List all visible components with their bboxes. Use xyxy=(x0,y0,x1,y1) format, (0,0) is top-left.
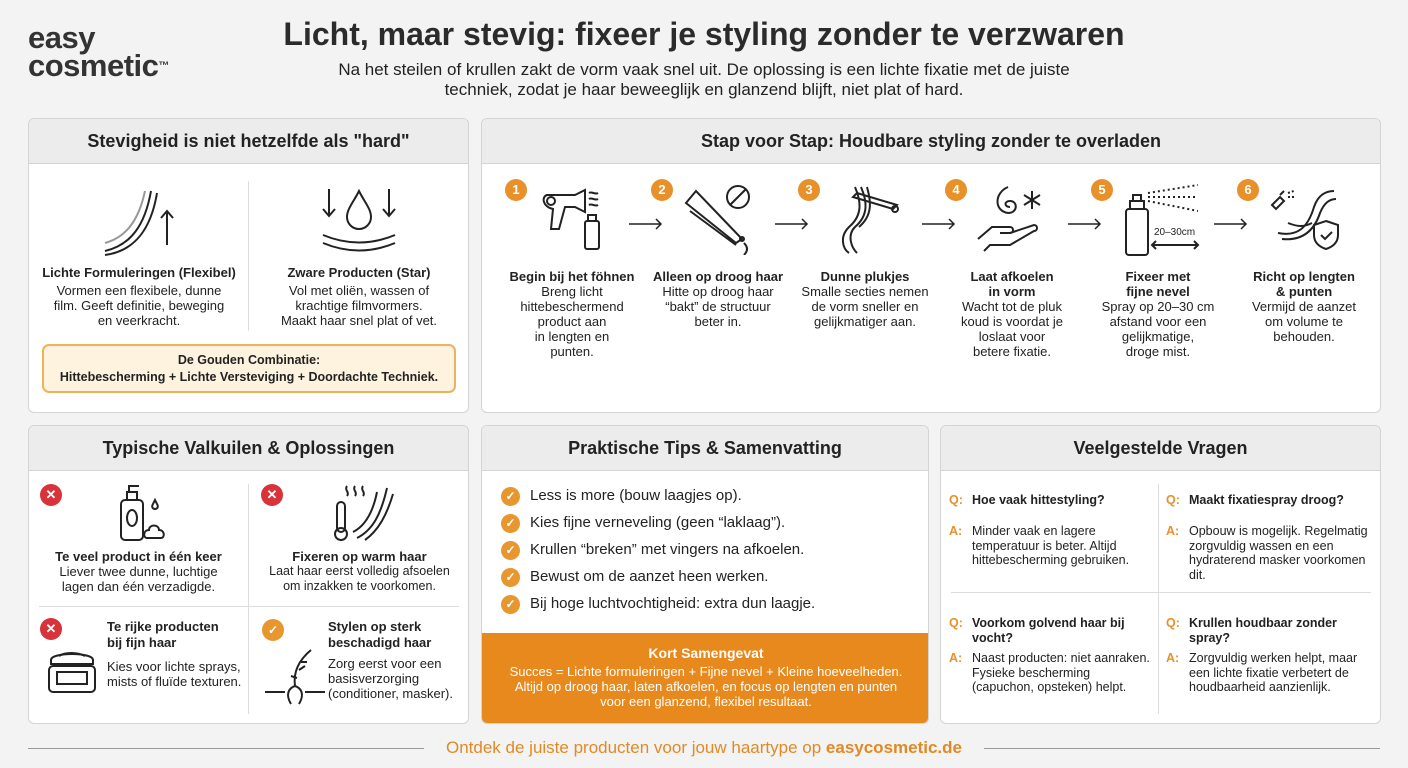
step 6: & punten xyxy=(1276,284,1332,299)
icon: flexible strands xyxy=(104,190,174,256)
step 5: gelijkmatige, xyxy=(1122,329,1194,344)
solution: damaged hair: Stylen op sterk xyxy=(328,619,421,634)
pitfall: warm hair: om inzakken te voorkomen. xyxy=(283,579,436,593)
icon: hair follicle xyxy=(265,649,325,704)
panel: stevigheid xyxy=(28,118,469,413)
step 2 xyxy=(651,179,783,329)
subtitle: Na het steilen of krullen zakt de vorm vaak snel uit. De oplossing is een lichte fixatie met de juiste xyxy=(338,60,1070,79)
step 2: 2 xyxy=(658,182,666,197)
step 3 xyxy=(798,179,929,329)
pitfall: too much product: lagen dan één verzadigde. xyxy=(62,579,215,594)
text: heavy products: Zware Producten (Star) xyxy=(287,265,431,280)
step 3: Smalle secties nemen xyxy=(801,284,929,299)
step 5 xyxy=(1091,179,1214,359)
heading: Typische Valkuilen & Oplossingen xyxy=(103,438,394,458)
icon: dryer xyxy=(542,188,600,250)
panel: FAQ: Zorgvuldig werken helpt, maar een lichte fixatie verbetert de houdbaarheid aanzienlijk. xyxy=(1189,651,1357,694)
pitfall: warm hair xyxy=(261,484,450,593)
heading xyxy=(482,119,1380,164)
faq 4: Krullen houdbaar zonder spray? xyxy=(1189,616,1337,644)
step 1: hittebeschermend xyxy=(520,299,624,314)
panel: FAQ: Q: xyxy=(949,493,963,507)
pitfall: rich products: ✕ xyxy=(46,621,56,636)
step 4: koud is voordat je xyxy=(961,314,1063,329)
panel: praktische tips xyxy=(481,425,929,724)
step 2: Alleen op droog haar xyxy=(653,269,783,284)
checklist: ✓ xyxy=(505,516,516,530)
subtitle xyxy=(338,60,1070,99)
pitfall: rich products: Kies voor lichte sprays, mists of fluïde texturen. xyxy=(107,659,241,689)
step 2: “bakt” de structuur xyxy=(665,299,771,314)
summary box: Altijd op droog haar, laten afkoelen, en focus op lengten en punten xyxy=(515,679,897,694)
checklist: ✓ xyxy=(505,597,516,611)
pitfall: warm hair: Fixeren op warm haar xyxy=(292,549,427,564)
step 4 xyxy=(945,179,1063,359)
logo xyxy=(28,20,169,83)
icon: spray bottle distance: 20–30cm xyxy=(1154,227,1195,238)
step 4: Wacht tot de pluk xyxy=(962,299,1062,314)
text: light formulas: film. Geeft definitie, beweging xyxy=(54,298,224,313)
panel: FAQ: Opbouw is mogelijk. Regelmatig zorgvuldig wassen en een hydraterend masker voorkomen dit. xyxy=(1189,524,1368,582)
step 5: droge mist. xyxy=(1126,344,1190,359)
logo: easy xyxy=(28,20,95,55)
step 3: 3 xyxy=(805,182,813,197)
step 6: om volume te xyxy=(1265,314,1343,329)
panel: FAQ: A: xyxy=(949,524,962,538)
panel: FAQ: Q: xyxy=(949,616,963,630)
text: heavy products: krachtige filmvormers. xyxy=(295,298,423,313)
icon: bottle foam xyxy=(120,485,165,541)
checklist: Less is more (bouw laagjes op). xyxy=(530,487,742,504)
step 2: beter in. xyxy=(694,314,741,329)
step 1: in lengten en xyxy=(535,329,609,344)
icon: flat iron xyxy=(684,185,750,255)
pitfall: warm hair: ✕ xyxy=(267,487,277,502)
callout: golden combination xyxy=(42,344,456,393)
step 6: Vermijd de aanzet xyxy=(1252,299,1356,314)
checklist: Bewust om de aanzet heen werken. xyxy=(530,568,768,585)
callout: golden combination: De Gouden Combinatie: xyxy=(178,353,320,367)
step 2: Hitte op droog haar xyxy=(662,284,774,299)
text: light formulas: Vormen een flexibele, dunne xyxy=(57,283,221,298)
summary box: voor een glanzend, flexibel resultaat. xyxy=(600,694,812,709)
icon: heavy drops xyxy=(322,188,396,252)
step 4: betere fixatie. xyxy=(973,344,1051,359)
solution: damaged hair xyxy=(262,619,453,704)
pitfall: too much product: Te veel product in één keer xyxy=(55,549,222,564)
step 4: in vorm xyxy=(989,284,1035,299)
text: light formulas xyxy=(42,265,236,328)
arrow xyxy=(775,218,808,230)
arrow xyxy=(1214,218,1247,230)
checklist: Krullen “breken” met vingers na afkoelen. xyxy=(530,541,804,558)
heading: Stap voor Stap: Houdbare styling zonder te overladen xyxy=(701,131,1161,151)
checklist: Kies fijne verneveling (geen “laklaag”). xyxy=(530,514,785,531)
solution: damaged hair: Zorg eerst voor een basisverzorging (conditioner, masker). xyxy=(328,656,453,701)
icon: hair shield xyxy=(1270,190,1339,250)
solution: damaged hair: ✓ xyxy=(268,623,278,637)
text: heavy products: Maakt haar snel plat of vet. xyxy=(281,313,437,328)
subtitle: techniek, zodat je haar beweeglijk en glanzend blijft, niet plat of hard. xyxy=(445,80,963,99)
logo: cosmetic™ xyxy=(28,48,169,83)
step 5: Fixeer met xyxy=(1125,269,1191,284)
icon: thermometer waves xyxy=(334,485,394,541)
heading: Praktische Tips & Samenvatting xyxy=(568,438,842,458)
arrow xyxy=(922,218,955,230)
summary box xyxy=(482,633,930,725)
heading xyxy=(482,426,928,471)
step 5: afstand voor een xyxy=(1110,314,1206,329)
text: heavy products xyxy=(281,265,437,328)
step 3: gelijkmatiger aan. xyxy=(814,314,916,329)
icon: hand cooling xyxy=(977,186,1040,252)
step 1: 1 xyxy=(512,182,520,197)
icon: spray bottle distance xyxy=(1125,184,1200,256)
text: light formulas: en veerkracht. xyxy=(98,313,180,328)
text: heavy products: Vol met oliën, wassen of xyxy=(289,283,429,298)
step 5: Spray op 20–30 cm xyxy=(1102,299,1214,314)
panel: FAQ xyxy=(940,425,1381,724)
step 6: Richt op lengten xyxy=(1253,269,1355,284)
faq 2: Maakt fixatiespray droog? xyxy=(1189,493,1344,507)
pitfall: too much product xyxy=(40,484,222,594)
step 1: punten. xyxy=(550,344,594,359)
icon: curl strand xyxy=(842,186,899,254)
panel: FAQ: A: xyxy=(949,651,962,665)
arrow xyxy=(1068,218,1101,230)
step 4: 4 xyxy=(952,182,960,197)
checklist: ✓ xyxy=(505,570,516,584)
icon: cream jar xyxy=(48,652,96,693)
heading xyxy=(29,426,468,471)
checklist: ✓ xyxy=(505,489,516,503)
arrow xyxy=(629,218,662,230)
panel: FAQ: Q: xyxy=(1166,493,1180,507)
pitfall: too much product: ✕ xyxy=(46,487,56,502)
step 4: Laat afkoelen xyxy=(970,269,1054,284)
step 6: behouden. xyxy=(1273,329,1335,344)
panel: stap voor stap xyxy=(481,118,1381,413)
text: light formulas: Lichte Formuleringen (Flexibel) xyxy=(42,265,236,280)
callout: golden combination: Hittebescherming + Lichte Versteviging + Doordachte Techniek. xyxy=(60,370,438,384)
heading: Stevigheid is niet hetzelfde als "hard" xyxy=(87,131,410,151)
title: Licht, maar stevig: fixeer je styling zonder te verzwaren xyxy=(283,16,1125,52)
step 1 xyxy=(505,179,634,359)
checklist: ✓ xyxy=(505,543,516,557)
checklist xyxy=(501,487,815,614)
panel: FAQ: Minder vaak en lagere temperatuur is beter. Altijd hittebescherming gebruiken. xyxy=(972,524,1129,567)
pitfall: rich products: Te rijke producten xyxy=(107,619,219,634)
step 3: de vorm sneller en xyxy=(812,299,918,314)
summary box: Succes = Lichte formuleringen + Fijne nevel + Kleine hoeveelheden. xyxy=(510,664,902,679)
step 1: product aan xyxy=(538,314,606,329)
pitfall: rich products: bij fijn haar xyxy=(107,635,176,650)
panel: FAQ: Q: xyxy=(1166,616,1180,630)
step 5: fijne nevel xyxy=(1126,284,1190,299)
faq 3: Voorkom golvend haar bij vocht? xyxy=(972,616,1125,644)
solution: damaged hair: beschadigd haar xyxy=(328,635,431,650)
pitfall: warm hair: Laat haar eerst volledig afsoelen xyxy=(269,564,450,578)
pitfall: rich products xyxy=(40,618,241,693)
step 5: 5 xyxy=(1098,182,1106,197)
heading xyxy=(29,119,468,164)
step 1: Breng licht xyxy=(541,284,603,299)
step 3: Dunne plukjes xyxy=(821,269,909,284)
panel: FAQ: A: xyxy=(1166,651,1179,665)
panel: FAQ: Naast producten: niet aanraken. Fysieke bescherming (capuchon, opsteken) helpt. xyxy=(972,651,1150,694)
heading xyxy=(941,426,1380,471)
panel: valkuilen xyxy=(28,425,469,724)
checklist: Bij hoge luchtvochtigheid: extra dun laagje. xyxy=(530,595,815,612)
step 6 xyxy=(1237,179,1356,344)
step 6: 6 xyxy=(1244,182,1252,197)
heading: Veelgestelde Vragen xyxy=(1073,438,1248,458)
step 1: Begin bij het föhnen xyxy=(510,269,634,284)
pitfall: too much product: Liever twee dunne, luchtige xyxy=(59,564,218,579)
summary box: Kort Samengevat xyxy=(648,645,764,661)
panel: FAQ: A: xyxy=(1166,524,1179,538)
footer: Ontdek de juiste producten voor jouw haartype op easycosmetic.de xyxy=(446,738,962,757)
step 4: loslaat voor xyxy=(979,329,1045,344)
faq 1: Hoe vaak hittestyling? xyxy=(972,493,1105,507)
